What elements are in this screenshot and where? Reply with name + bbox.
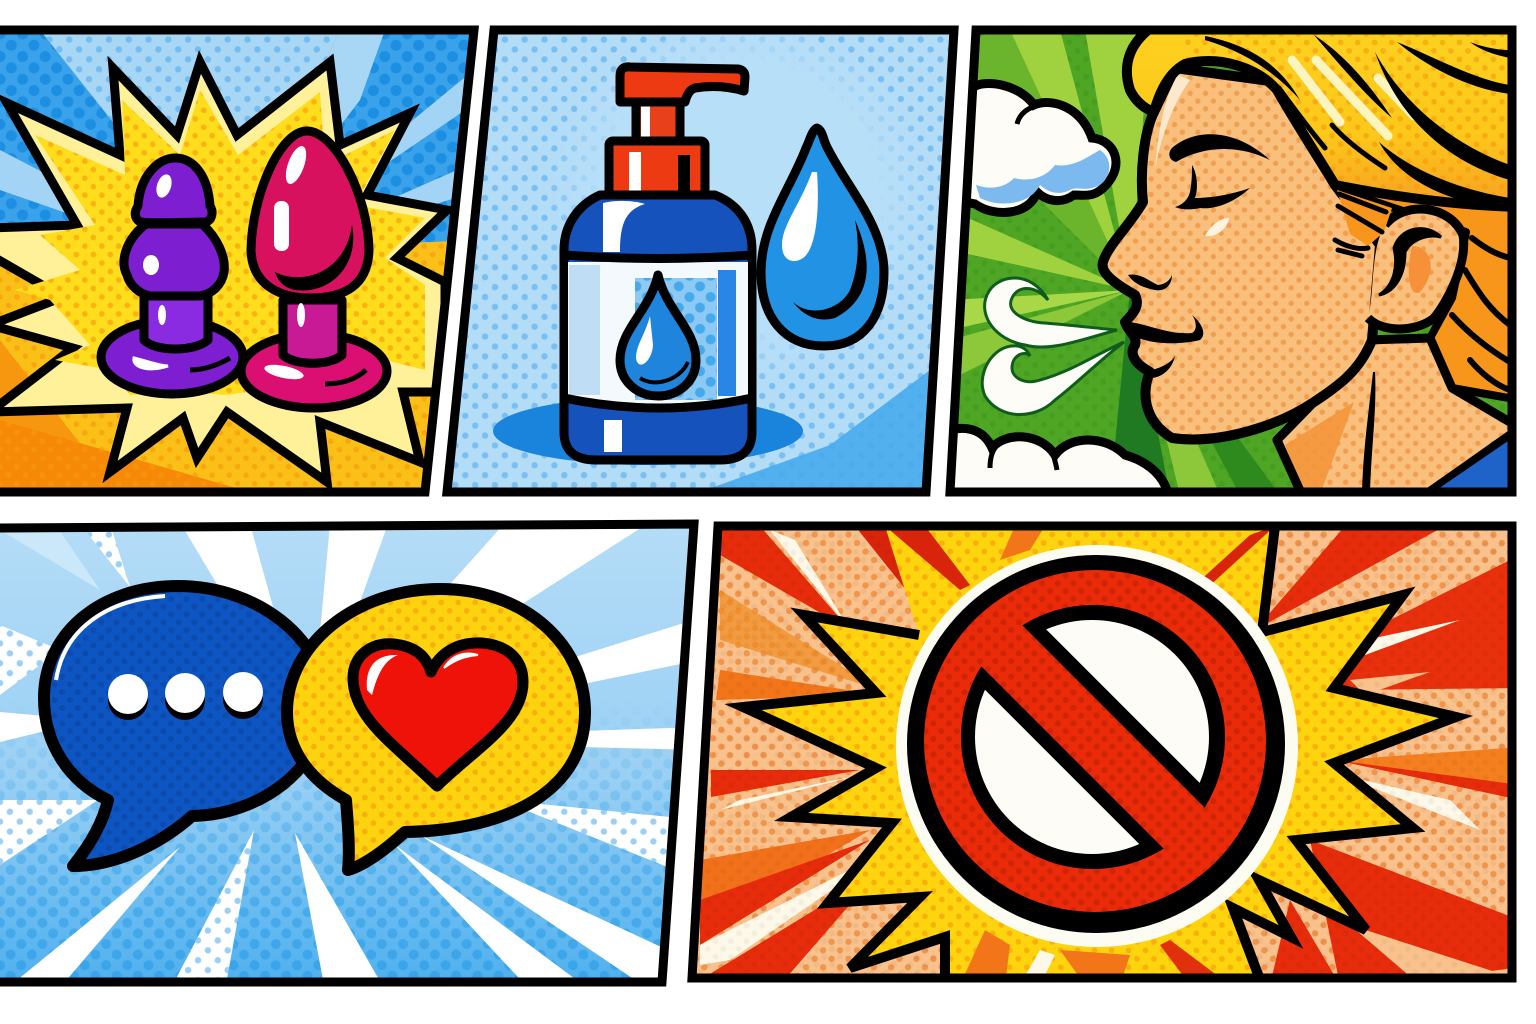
mouth (1130, 315, 1203, 343)
closed eye (1175, 165, 1250, 209)
face (1103, 68, 1380, 439)
starburst: yellow core (15, 90, 425, 395)
starburst: pale outer (0, 62, 447, 482)
eyebrow (1169, 134, 1270, 162)
icon: blue speech bubble (44, 586, 325, 866)
three dots (108, 672, 263, 720)
nostril (1128, 274, 1172, 290)
shirt (1428, 441, 1508, 488)
hair: orange back section (1346, 192, 1508, 402)
heart (353, 643, 523, 786)
panel: profile face exhaling (950, 25, 1520, 495)
icon: purple toy (101, 158, 243, 394)
panel: toys on yellow starburst (0, 30, 480, 495)
panel: prohibition sign burst (690, 524, 1520, 985)
starburst: yellow (743, 526, 1456, 985)
panel: pump bottle and droplet (440, 25, 960, 495)
panel: speech bubbles (0, 524, 700, 990)
breath swirl (982, 278, 1124, 415)
hair: yellow top (1127, 25, 1520, 208)
icon: big droplet (761, 128, 884, 346)
icon: prohibition sign (896, 545, 1298, 947)
hair: sideburn strands (1335, 190, 1392, 256)
icon: magenta toy (241, 131, 387, 408)
shadow ellipse (493, 397, 803, 465)
cloud: upper (955, 83, 1116, 212)
cloud: lower (950, 428, 1168, 495)
icon: yellow speech bubble (287, 589, 585, 870)
icon: bottle (564, 67, 752, 460)
ear (1368, 209, 1464, 329)
neck (1277, 338, 1520, 495)
